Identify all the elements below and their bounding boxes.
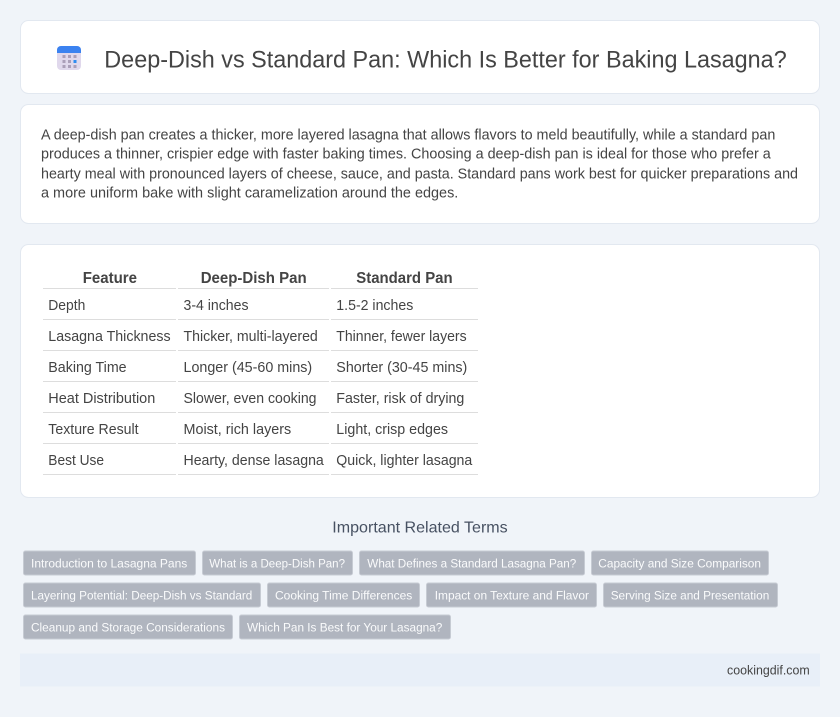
tag bbox=[268, 583, 420, 607]
table row: texture result: Moist, rich layers bbox=[184, 422, 291, 438]
table row: depth: 3-4 inches bbox=[184, 298, 248, 314]
table row: texture result: Light, crisp edges bbox=[336, 422, 448, 438]
table row: texture result bbox=[43, 422, 478, 444]
table header row bbox=[43, 270, 478, 289]
tag: Serving Size and Presentation bbox=[611, 588, 769, 602]
table row: heat distribution: Faster, risk of drying bbox=[336, 391, 464, 407]
tag: What Defines a Standard Lasagna Pan? bbox=[367, 556, 576, 570]
heading: important related terms: Important Related Terms bbox=[332, 520, 508, 537]
footer: cookingdif.com bbox=[727, 663, 810, 677]
footer bbox=[20, 654, 820, 686]
table header row: Deep-Dish Pan bbox=[201, 270, 307, 287]
table row: baking time: Baking Time bbox=[48, 360, 127, 376]
table row: baking time: Longer (45-60 mins) bbox=[184, 360, 312, 376]
table row: lasagna thickness bbox=[43, 329, 478, 351]
panel: comparison table bbox=[20, 244, 820, 498]
table row: heat distribution bbox=[43, 391, 478, 413]
table row: lasagna thickness: Thicker, multi-layered bbox=[184, 329, 318, 345]
tag bbox=[426, 583, 596, 607]
panel: summary text bbox=[20, 104, 820, 224]
tag: What is a Deep-Dish Pan? bbox=[209, 556, 345, 570]
panel: summary text: produces a thinner, crispier edge with faster baking times. Choosing a deep-dish pan is ideal for those who prefer a bbox=[41, 146, 771, 162]
table row: heat distribution: Heat Distribution bbox=[48, 391, 155, 407]
table header row: Standard Pan bbox=[356, 270, 453, 287]
tag bbox=[24, 615, 232, 639]
tag: Impact on Texture and Flavor bbox=[435, 588, 589, 602]
table row: depth bbox=[43, 298, 478, 320]
tag: Capacity and Size Comparison bbox=[598, 556, 761, 570]
tag bbox=[202, 551, 352, 575]
table row: best use: Quick, lighter lasagna bbox=[336, 453, 472, 469]
tag bbox=[360, 551, 584, 575]
table header row: Feature bbox=[83, 270, 137, 287]
table row: lasagna thickness: Lasagna Thickness bbox=[48, 329, 171, 345]
table row: best use bbox=[43, 453, 478, 475]
tag: Cleanup and Storage Considerations bbox=[31, 620, 225, 634]
tag bbox=[592, 551, 768, 575]
panel: header bbox=[20, 20, 820, 94]
tag bbox=[240, 615, 450, 639]
table row: best use: Best Use bbox=[48, 453, 104, 469]
panel: related term tags bbox=[24, 551, 778, 639]
tag: Cooking Time Differences bbox=[275, 588, 412, 602]
tag: Layering Potential: Deep-Dish vs Standard bbox=[31, 588, 252, 602]
table row: best use: Hearty, dense lasagna bbox=[184, 453, 324, 469]
tag: Introduction to Lasagna Pans bbox=[31, 556, 187, 570]
table row: heat distribution: Slower, even cooking bbox=[184, 391, 316, 407]
table row: baking time: Shorter (30-45 mins) bbox=[336, 360, 467, 376]
table row: lasagna thickness: Thinner, fewer layers bbox=[336, 329, 467, 345]
tag bbox=[24, 583, 260, 607]
tag bbox=[24, 551, 196, 575]
tag bbox=[604, 583, 778, 607]
panel: summary text: A deep-dish pan creates a thicker, more layered lasagna that allows flavors to meld beautifully, while a standard pan bbox=[41, 127, 775, 143]
panel: summary text: a more uniform bake with slight caramelization around the edges. bbox=[41, 185, 458, 201]
tag: Which Pan Is Best for Your Lasagna? bbox=[247, 620, 442, 634]
table row: depth: Depth bbox=[48, 298, 85, 314]
panel: summary text: hearty meal with pronounced layers of cheese, sauce, and pasta. Standard pans work best for quicker preparations and bbox=[41, 166, 798, 182]
table row: baking time bbox=[43, 360, 478, 382]
table row: depth: 1.5-2 inches bbox=[336, 298, 413, 314]
table row: texture result: Texture Result bbox=[48, 422, 139, 438]
title: Deep-Dish vs Standard Pan: Which Is Better for Baking Lasagna? bbox=[104, 46, 787, 73]
icon: calendar bbox=[57, 46, 81, 70]
